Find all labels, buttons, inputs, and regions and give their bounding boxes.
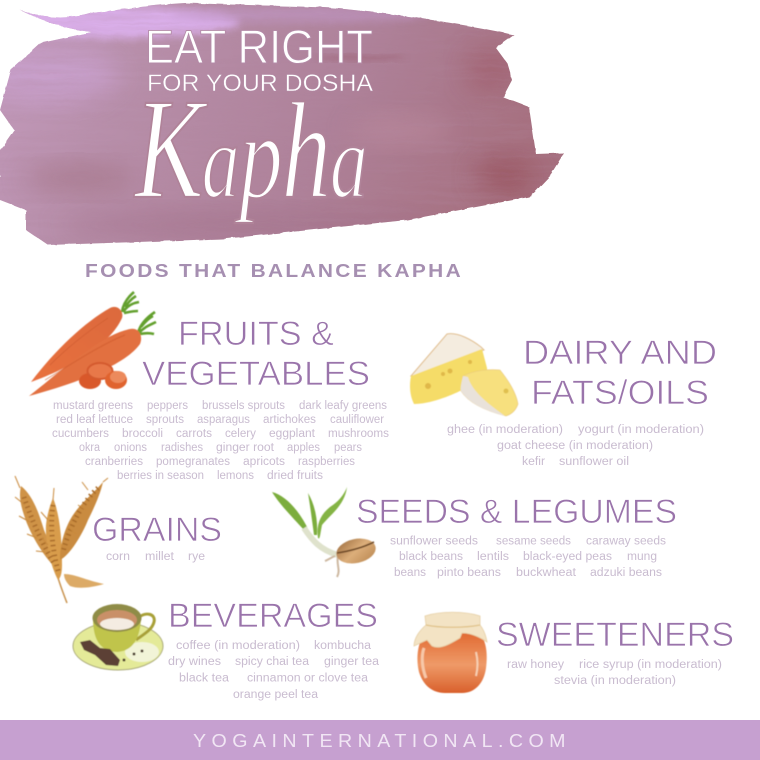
icon: cheese [410,334,518,416]
heading: seeds and legumes: SEEDS & LEGUMES [356,493,677,531]
title [133,20,373,229]
text block: fruits and vegetables list: radishes [161,442,203,454]
heading: fruits and vegetables: FRUITS & [178,315,334,353]
text block: grains list: rye [188,551,205,563]
text block: fruits and vegetables list: cucumbers [52,428,109,440]
text block: seeds list: caraway seeds [586,536,666,548]
text block: fruits and vegetables list: okra [79,442,101,454]
text block: seeds list: beans [394,567,426,579]
text block: beverages list: ginger tea [324,656,380,668]
title script: Kapha: Kapha [133,70,368,229]
text block: grains list [106,551,205,563]
text block: fruits and vegetables list: pears [334,442,362,454]
text block: fruits and vegetables list: cranberries [85,456,143,468]
text block: fruits and vegetables list: onions [114,442,147,454]
text block: seeds list: lentils [477,551,509,563]
text block: fruits and vegetables list: artichokes [263,414,316,426]
text block: seeds list: buckwheat [516,567,577,579]
footer bar [0,720,760,760]
title line: eat right: EAT RIGHT [145,20,373,73]
text block: beverages list: orange peel tea [233,689,319,701]
heading: beverages: BEVERAGES [168,597,378,635]
text block: fruits and vegetables list: mushrooms [328,428,389,440]
text block: fruits and vegetables list: asparagus [197,414,250,426]
text block: seeds list: black beans [399,551,463,563]
heading: dairy and fats/oils [523,334,717,412]
text block: beverages list: spicy chai tea [235,656,310,668]
text block: fruits and vegetables list: eggplant [269,428,316,440]
footer url: YOGAINTERNATIONAL.COM [193,731,571,751]
icon: sprouting seed [272,487,378,577]
text block: dairy list [447,424,704,468]
text block: fruits and vegetables list: cauliflower [330,414,384,426]
text block: sweeteners list: stevia (in moderation) [554,675,676,687]
panel: seeds and legumes [272,487,677,579]
heading: grains: GRAINS [92,511,222,549]
text block: fruits and vegetables list: mustard greens [53,400,133,412]
text block: beverages list [168,640,380,701]
text block: seeds list [390,536,666,579]
text block: dairy list: sunflower oil [559,456,629,468]
icon: honey jar [414,612,487,693]
text block: fruits and vegetables list: pomegranates [156,456,230,468]
heading: dairy and fats/oils: DAIRY AND [523,334,717,372]
text block: fruits and vegetables list: ginger root [216,442,275,454]
text block: fruits and vegetables list: raspberries [298,456,355,468]
text block: grains list: millet [145,551,175,563]
text block: beverages list: dry wines [168,656,221,668]
text block: fruits and vegetables list: sprouts [146,414,184,426]
text block: fruits and vegetables list: red leaf lettuce [56,414,133,426]
panel: beverages [73,597,380,701]
text block: fruits and vegetables list: apricots [243,456,285,468]
title line: for your dosha: FOR YOUR DOSHA [147,70,373,97]
text block: seeds list: sesame seeds [496,536,571,548]
text block: beverages list: coffee (in moderation) [176,640,300,652]
watercolor brush stroke [0,0,580,250]
panel: dairy and fats/oils [410,334,717,468]
icon: tea cup [73,604,163,670]
text block: fruits and vegetables list: peppers [147,400,188,412]
text block: seeds list: black-eyed peas [523,551,612,563]
text block: seeds list: pinto beans [437,567,501,579]
text block: fruits and vegetables list: apples [287,442,320,454]
panel: sweeteners [414,612,734,693]
text block: fruits and vegetables list [52,400,389,482]
text block: beverages list: black tea [179,672,230,684]
text block: fruits and vegetables list: broccoli [122,428,163,440]
heading: fruits and vegetables: VEGETABLES [142,355,370,393]
text block: seeds list: adzuki beans [590,567,662,579]
text block: fruits and vegetables list: berries in season [117,470,204,482]
text block: beverages list: cinnamon or clove tea [247,672,369,684]
text block: sweeteners list: raw honey [507,659,564,671]
text block: fruits and vegetables list: celery [225,428,256,440]
text block: dairy list: kefir [522,456,545,468]
text block: fruits and vegetables list: dark leafy greens [299,400,387,412]
icon: wheat [15,476,108,603]
text block: fruits and vegetables list: carrots [176,428,212,440]
text block: dairy list: goat cheese (in moderation) [497,440,653,452]
text block: fruits and vegetables list: brussels sprouts [202,400,285,412]
text block: seeds list: sunflower seeds [390,536,478,548]
panel: grains [15,476,222,603]
text block: fruits and vegetables list: dried fruits [267,470,323,482]
text block: dairy list: yogurt (in moderation) [578,424,704,436]
icon: carrots [29,292,156,396]
panel: fruits and vegetables [29,292,389,482]
text block: seeds list: mung [627,551,657,563]
heading: fruits and vegetables [142,315,370,393]
heading: sweeteners: SWEETENERS [496,616,734,654]
text block: grains list: corn [106,551,130,563]
text block: sweeteners list [507,659,722,687]
heading: dairy and fats/oils: FATS/OILS [531,374,709,412]
text block: sweeteners list: rice syrup (in moderation) [579,659,722,671]
subtitle: FOODS THAT BALANCE KAPHA [85,261,463,281]
text block: fruits and vegetables list: lemons [217,470,254,482]
text block: dairy list: ghee (in moderation) [447,424,563,436]
text block: beverages list: kombucha [314,640,372,652]
